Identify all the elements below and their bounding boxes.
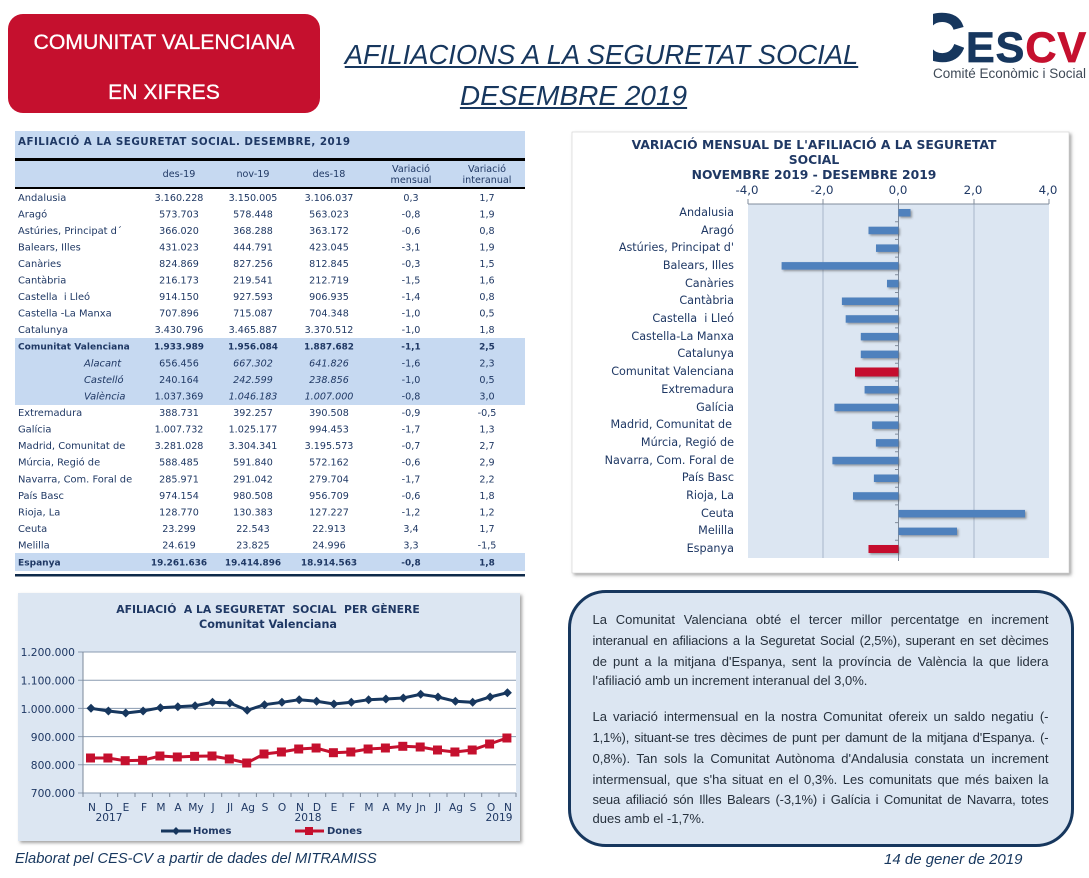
table row: Comunitat Valenciana and provinces: 242.599 [233,375,273,386]
table rows: remaining communities: 956.709 [309,491,349,502]
table row: Comunitat Valenciana and provinces: 238.856 [309,375,349,386]
bar chart category labels: Comunitat Valenciana [611,365,734,378]
table rows: remaining communities: 285.971 [159,474,199,486]
table rows: remaining communities: 591.840 [233,458,273,468]
table rows: remaining communities: Galícia [18,424,51,436]
table rows: autonomous communities: Canàries [18,258,61,270]
line chart plot and axes: F [141,802,147,814]
line chart plot and axes: O [278,802,286,814]
line chart plot and axes: S [262,802,269,814]
bar chart category labels: Castella i Lleó [652,312,734,325]
line chart plot and axes: J [210,802,215,814]
table row: Espanya total: 19.414.896 [225,558,281,568]
table rows: autonomous communities: 216.173 [159,276,199,286]
table rows: remaining communities: -0,7 [402,441,420,452]
line chart plot and axes: 1.100.000 [21,674,75,688]
table rows: remaining communities: 3,4 [403,524,419,535]
table rows: remaining communities: 2,2 [479,474,495,486]
table row: Comunitat Valenciana and provinces: 667.302 [233,358,273,370]
bar chart category labels [605,206,734,555]
table row: Comunitat Valenciana and provinces: 1.007.000 [305,392,353,402]
logo: CES-CV: Comité Econòmic i Social [933,66,1086,81]
bar chart category labels: Catalunya [677,347,734,360]
line chart plot and axes: Ag [449,802,463,814]
table rows: remaining communities: -0,6 [402,491,420,502]
table rows: remaining communities: 994.453 [309,424,349,436]
table rows: remaining communities: Madrid, Comunitat de [18,441,125,452]
table row: Comunitat Valenciana and provinces: València [84,390,125,402]
table rows: remaining communities [18,408,496,552]
header badge: Comunitat Valenciana en xifres: COMUNITAT VALENCIANA [34,31,294,54]
main title: DESEMBRE 2019 [460,80,687,111]
table rows: remaining communities: -1,7 [402,474,420,486]
table row: Espanya total: 19.261.636 [151,558,207,568]
table row: Comunitat Valenciana and provinces: 1.887.682 [304,342,354,352]
panel: data table [15,131,525,576]
bar chart title [632,137,997,182]
table row: Comunitat Valenciana and provinces: 1.046.183 [229,392,277,402]
header badge: Comunitat Valenciana en xifres [8,14,320,113]
bar chart bars [782,209,1025,553]
line chart plot and axes: 1.000.000 [21,703,75,716]
line chart plot and axes: 2017 [96,812,122,824]
commentary paragraph 2: seua afiliació són Illes Balears (-3,1%) i Galícia i Comunitat de Navarra, totes [592,792,1048,806]
table rows: autonomous communities: 0,8 [479,292,495,303]
callout: commentary text [568,590,1074,847]
table rows: remaining communities: 128.770 [159,508,199,518]
table row: Comunitat Valenciana and provinces: 240.164 [159,375,199,386]
table rows: remaining communities: -1,7 [402,424,420,436]
line chart plot and axes: My [396,802,412,814]
bar chart category labels: Madrid, Comunitat de [610,418,732,431]
table rows: remaining communities: 23.825 [236,540,270,552]
table rows: autonomous communities: 1,6 [479,276,495,286]
table rows: autonomous communities: 3.106.037 [305,193,353,204]
table rows: remaining communities: 130.383 [233,508,273,518]
table rows: autonomous communities: 914.150 [159,292,199,303]
table rows: remaining communities: 291.042 [233,474,273,486]
table rows: autonomous communities: 906.935 [309,292,349,303]
table rows: autonomous communities: 423.045 [309,242,349,254]
table row: Comunitat Valenciana and provinces [18,342,495,402]
table rows: remaining communities: 572.162 [309,458,349,468]
table rows: remaining communities: 1,3 [479,424,495,436]
table row: Comunitat Valenciana and provinces: 641.826 [309,358,349,370]
bar chart category labels: Galícia [696,401,734,414]
table column headers [163,163,511,186]
table row: Comunitat Valenciana and provinces: Comunitat Valenciana [18,342,130,352]
table rows: remaining communities: -0,5 [478,408,496,419]
table row: Comunitat Valenciana and provinces: 656.456 [159,358,199,370]
line chart plot and axes: Jn [415,802,426,814]
table rows: remaining communities: 980.508 [233,491,273,502]
line chart plot and axes: D [313,802,321,814]
commentary paragraph 1 [592,612,1048,688]
table column headers: nov-19 [236,169,270,180]
table rows: remaining communities: 3.195.573 [305,441,353,452]
table rows: autonomous communities: -3,1 [402,242,420,254]
line chart plot and axes: D [105,802,113,814]
bar chart category labels: Navarra, Com. Foral de [605,454,734,467]
table rows: remaining communities: 2,7 [479,441,495,452]
commentary paragraph 2 [592,708,1048,826]
line chart plot and axes: M [156,802,166,814]
bar chart category labels: Rioja, La [686,489,734,502]
commentary paragraph 2: intermensual, que s'ha situat en el 0,3%. Les comunitats que més baixen la [592,772,1048,786]
line chart title [116,603,420,631]
line chart legend: Dones [327,826,362,837]
bar chart axis and plot area [735,183,1057,561]
bar chart axis and plot area: 2,0 [964,183,982,197]
table rows: autonomous communities: -1,0 [402,308,420,320]
table rows: remaining communities: -1,5 [478,540,496,552]
table row: Espanya total: Espanya [18,558,61,568]
line chart plot and axes [21,646,516,824]
table rows: remaining communities: 279.704 [309,474,349,486]
table rows: autonomous communities: 0,3 [403,193,419,204]
logo: CES-CV [933,12,1087,81]
table row: Espanya total: 18.914.563 [301,558,357,568]
table row: Espanya total: 1,8 [479,558,495,568]
table rows: autonomous communities: 363.172 [309,226,349,237]
commentary paragraph 2: La variació intermensual en la nostra Comunitat ofereix un saldo negatiu (- [592,708,1048,724]
table rows: autonomous communities: 212.719 [309,276,349,286]
bar chart category labels: Cantàbria [679,294,734,307]
table rows: remaining communities: Ceuta [18,524,47,535]
table rows: remaining communities: 392.257 [233,408,273,419]
table rows: autonomous communities: 3.150.005 [229,193,277,204]
table rows: autonomous communities: 573.703 [159,210,199,220]
table rows: autonomous communities: 0,8 [479,226,495,237]
table column headers: des-19 [163,169,195,180]
main title: AFILIACIONS A LA SEGURETAT SOCIAL [345,39,858,70]
line chart plot and axes: O [487,802,495,814]
table row: Comunitat Valenciana and provinces: -0,8 [402,392,420,402]
bar chart category labels: Ceuta [701,507,734,520]
table rows: autonomous communities: -0,8 [402,210,420,220]
line chart title: Comunitat Valenciana [199,618,337,631]
table rows: autonomous communities: 563.023 [309,210,349,220]
table rows: autonomous communities: 1,7 [479,193,495,204]
line series: Homes [91,693,507,713]
table rows: remaining communities: 1,2 [479,508,495,518]
panel: monthly variation bar chart [572,132,1069,573]
line chart plot and axes: A [382,802,390,814]
table row: Comunitat Valenciana and provinces: 2,3 [479,358,495,370]
table rows: autonomous communities: 3.465.887 [229,325,277,336]
table rows: autonomous communities: -1,5 [402,276,420,286]
bar chart category labels: Melilla [698,524,734,537]
table rows: autonomous communities: Aragó [18,208,47,220]
table rows: remaining communities: -0,6 [402,458,420,468]
table rows: remaining communities: 22.543 [236,524,270,535]
commentary paragraph 2: 0,8%). Tan sols la Comunitat Autònoma d'Andalusia constata un increment [592,750,1048,766]
table rows: autonomous communities: 366.020 [159,226,199,237]
bar chart category labels: Castella-La Manxa [631,330,734,343]
table row: Comunitat Valenciana and provinces: -1,6 [402,358,420,370]
table rows: autonomous communities: Castella i Lleó [18,291,90,303]
table rows: autonomous communities: -1,0 [402,325,420,336]
line chart legend [161,826,362,837]
line chart plot and axes: E [331,802,338,814]
table rows: autonomous communities: 3.160.228 [155,193,203,204]
line chart plot and axes: N [88,802,96,814]
table rows: remaining communities: 390.508 [309,408,349,419]
table rows: remaining communities: 2,9 [479,458,495,468]
table rows: remaining communities: 127.227 [309,508,349,518]
logo: CES-CV: ESCV [966,24,1087,72]
table title: AFILIACIÓ A LA SEGURETAT SOCIAL. DESEMBRE, 2019 [18,135,350,148]
table rows: remaining communities: Melilla [18,540,50,552]
table rows: autonomous communities: Balears, Illes [18,242,81,254]
table rows: remaining communities: 24.619 [162,540,196,552]
commentary paragraph 2: 1,1%), situant-se tres dècimes de punt per damunt de la mitjana d'Espanya. (- [592,730,1048,744]
table rows: autonomous communities: 0,5 [479,308,495,320]
table rows: autonomous communities: 444.791 [233,242,273,254]
table rows: autonomous communities: Castella -La Manxa [18,308,112,320]
bar chart category labels: Espanya [687,542,734,555]
table rows: remaining communities: 23.299 [162,524,196,535]
table rows: autonomous communities: 3.370.512 [305,325,353,336]
table row: Comunitat Valenciana and provinces: Castelló [84,374,124,386]
table rows: remaining communities: 974.154 [159,491,199,502]
table rows: autonomous communities: Cantàbria [18,274,66,286]
table rows: remaining communities: Múrcia, Regió de [18,456,100,468]
table row: Comunitat Valenciana and provinces: 0,5 [479,375,495,386]
line chart plot and axes: E [123,802,130,814]
table rows: autonomous communities: 812.845 [309,259,349,270]
bar chart axis and plot area: -2,0 [810,183,834,197]
bar chart category labels: País Basc [682,471,734,484]
table rows: autonomous communities: 431.023 [159,242,199,254]
table rows: remaining communities: 388.731 [159,408,199,419]
footer source note: Elaborat pel CES-CV a partir de dades del MITRAMISS [15,851,377,867]
table rows: autonomous communities: -0,6 [402,226,420,237]
table rows: remaining communities: Extremadura [18,408,82,419]
table rows: remaining communities: 24.996 [312,540,346,552]
line chart plot and axes: S [470,802,477,814]
table rows: autonomous communities: 927.593 [233,292,273,303]
line chart plot and axes: 800.000 [31,759,75,772]
line chart plot and axes: 1.200.000 [21,646,75,659]
bar chart axis and plot area: -4,0 [735,183,759,197]
table column headers: Variació [468,163,506,175]
table rows: remaining communities: 1,8 [479,491,495,502]
bar chart axis and plot area: 4,0 [1039,183,1057,197]
table rows: autonomous communities: 3.430.796 [155,325,203,336]
line chart plot and axes: Ag [241,802,255,814]
line chart plot and axes: 2019 [486,812,512,824]
commentary paragraph 1: La Comunitat Valenciana obté el tercer millor percentatge en increment [592,612,1048,626]
table rows: remaining communities: Navarra, Com. Foral de [18,474,132,486]
line chart title: AFILIACIÓ A LA SEGURETAT SOCIAL PER GÈNERE [116,603,420,616]
table rows: autonomous communities: -0,3 [402,259,420,270]
table rows: autonomous communities [18,193,495,336]
bar chart axis and plot area: 0,0 [889,183,907,197]
line chart plot and axes: 700.000 [31,787,75,800]
table rows: remaining communities: Rioja, La [18,508,60,518]
table row: Espanya total: -0,8 [401,558,421,568]
table rows: remaining communities: 1,7 [479,524,495,535]
table rows: remaining communities: 3.304.341 [229,441,277,452]
bar chart title: SOCIAL [789,153,839,167]
bar chart category labels: Balears, Illes [663,259,734,272]
table rows: autonomous communities: 1,9 [479,210,495,220]
header badge: Comunitat Valenciana en xifres: EN XIFRES [108,81,220,104]
table rows: autonomous communities: 707.896 [159,308,199,320]
table row: Comunitat Valenciana and provinces: 1.956.084 [228,342,278,352]
table rows: autonomous communities: 715.087 [233,308,273,320]
table column headers: des-18 [313,169,345,180]
table row: Comunitat Valenciana and provinces: 1.037.369 [155,392,203,402]
table rows: autonomous communities: 704.348 [309,308,349,320]
line chart plot and axes: Jl [434,802,441,814]
table rows: autonomous communities: 824.869 [159,259,199,270]
table rows: remaining communities: 3.281.028 [155,441,203,452]
commentary paragraph 2: dues amb el -1,7%. [592,810,705,826]
bar chart category labels: Astúries, Principat d' [619,241,734,254]
footer date: 14 de gener de 2019 [884,851,1022,868]
table row: Comunitat Valenciana and provinces: -1,1 [401,342,421,352]
table rows: autonomous communities: Andalusia [18,193,66,204]
line chart legend: Homes [193,826,231,837]
bar chart title: NOVEMBRE 2019 - DESEMBRE 2019 [692,168,936,182]
table rows: remaining communities: 3,3 [403,540,419,552]
table rows: autonomous communities: 578.448 [233,210,273,220]
table rows: autonomous communities: 1,5 [479,259,495,270]
line chart plot and axes: My [188,802,204,814]
table rows: autonomous communities: 219.541 [233,276,273,286]
table row: Comunitat Valenciana and provinces: 1.933.989 [154,342,204,352]
table rows: remaining communities: -1,2 [402,508,420,518]
line chart plot and axes: F [349,802,355,814]
line chart plot and axes: Jl [226,802,233,814]
table rows: autonomous communities: Astúries, Principat d´ [18,225,122,237]
table column headers: mensual [391,175,431,186]
line chart plot and axes: A [174,802,182,814]
table rows: remaining communities: 22.913 [312,524,346,535]
commentary paragraph 1: interanual en afiliacions a la Seguretat Social (2,5%), superant en set dècimes [592,632,1048,648]
bar chart category labels: Canàries [685,277,734,290]
commentary paragraph 1: l'afiliació amb un increment interanual del 3,0%. [592,672,867,688]
bar chart title: VARIACIÓ MENSUAL DE L'AFILIACIÓ A LA SEGURETAT [632,137,997,152]
table rows: remaining communities: País Basc [18,490,64,502]
bar chart category labels: Extremadura [661,383,734,396]
line chart plot and axes: N [296,802,304,814]
table rows: remaining communities: -0,9 [402,408,420,419]
panel: affiliation by gender line chart [18,593,520,841]
table row: Espanya total [18,558,495,568]
commentary paragraph 1: de punt a la mitjana d'Espanya, sent la província de València la que lidera [592,654,1048,668]
table rows: autonomous communities: 1,9 [479,242,495,254]
table column headers: interanual [463,175,511,186]
table rows: autonomous communities: Catalunya [18,325,68,336]
bar chart category labels: Múrcia, Regió de [641,436,734,449]
table rows: remaining communities: 1.007.732 [155,424,203,436]
table rows: remaining communities: 1.025.177 [229,424,277,436]
table row: Comunitat Valenciana and provinces: Alacant [83,358,122,370]
table rows: autonomous communities: 1,8 [479,325,495,336]
table row: Comunitat Valenciana and provinces: -1,0 [402,375,420,386]
table row: Comunitat Valenciana and provinces: 2,5 [479,342,495,352]
table row: Comunitat Valenciana and provinces: 3,0 [479,392,495,402]
line series: Dones [90,738,507,763]
table rows: autonomous communities: 368.288 [233,226,273,237]
line chart plot and axes: M [364,802,374,814]
line chart plot and axes: 2018 [295,812,322,824]
line chart plot and axes: N [504,802,512,814]
table rows: remaining communities: 588.485 [159,458,199,468]
bar chart category labels: Andalusia [679,206,734,219]
bar chart category labels: Aragó [701,224,734,237]
table column headers: Variació [392,163,430,175]
table rows: autonomous communities: 827.256 [233,259,273,270]
table rows: autonomous communities: -1,4 [402,292,420,303]
main title [344,39,858,111]
line chart plot and axes: 900.000 [31,731,75,744]
